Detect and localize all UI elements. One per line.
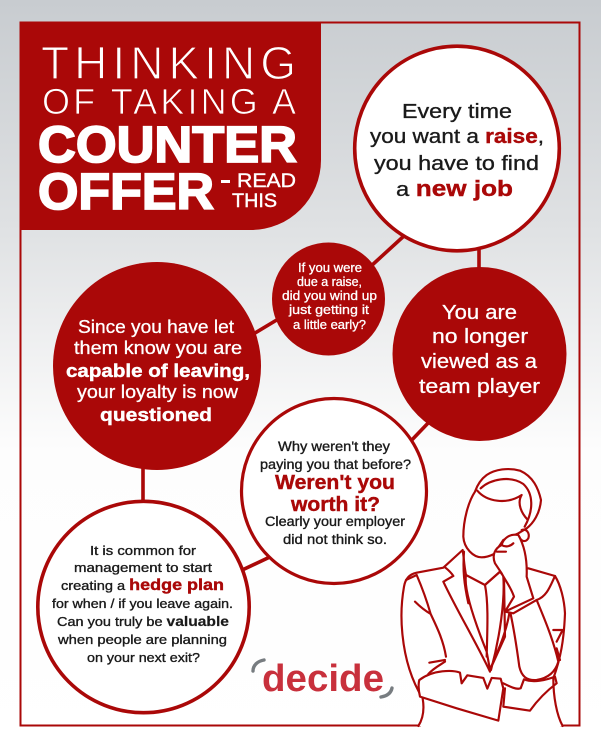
circle: team player: You are: [442, 302, 517, 324]
connector lines between circles: [143, 235, 479, 572]
circle: team player: no longer: [432, 326, 528, 348]
circle: due a raise: a little early?: [293, 318, 366, 332]
folded arm: [419, 671, 503, 721]
circle: hedge plan: when people are planning: [57, 632, 227, 647]
logo brackets: [253, 660, 392, 697]
circle: worth it: paying you that before?: [260, 457, 411, 472]
lapel: [443, 552, 490, 672]
title: this: THIS: [232, 191, 277, 212]
circle: due a raise: did you wind up: [282, 289, 377, 303]
circle: hedge plan: Can you truly be valuable: [57, 613, 229, 629]
title: of taking a: OF TAKING A: [42, 81, 296, 122]
circle: hedge plan: management to start: [74, 560, 212, 575]
circle: new job: Every time: [402, 101, 512, 123]
circle: worth it: [242, 398, 426, 584]
circle: loyalty: them know you are: [74, 338, 242, 358]
circle: new job: [355, 46, 559, 251]
circle: team player: team player: [419, 376, 540, 398]
head and hair: [463, 469, 541, 557]
circle: loyalty: Since you have let: [78, 317, 234, 337]
circle: hedge plan: on your next exit?: [87, 650, 200, 665]
circle: team player: [392, 267, 566, 441]
title: dash: [221, 180, 230, 183]
circle: worth it: Clearly your employer: [265, 514, 406, 529]
title panel: [20, 22, 321, 230]
circle: loyalty: [53, 262, 261, 470]
decide logo: [253, 658, 392, 700]
title: read: READ: [237, 171, 296, 192]
title: thinking: THINKING: [41, 37, 296, 89]
circle: due a raise: just getting it: [288, 303, 370, 317]
circle: hedge plan: [38, 501, 249, 713]
circle: new job: you want a raise ,: [370, 126, 544, 148]
circle: loyalty: questioned: [100, 405, 212, 425]
circle: hedge plan: It is common for: [90, 543, 197, 558]
circle: hedge plan: for when / if you leave again.: [52, 596, 233, 611]
raised hand and forearm: [494, 535, 533, 612]
circle: loyalty: capable of leaving,: [66, 361, 250, 381]
circle: due a raise: If you were: [298, 261, 362, 275]
logo wordmark: decide: [262, 658, 384, 700]
circle: hedge plan: creating a hedge plan: [61, 577, 224, 594]
circle: worth it: Why weren't they: [278, 439, 390, 454]
title: counter: COUNTER: [38, 116, 297, 173]
circle: new job: a new job: [396, 176, 513, 201]
circle: worth it: did not think so.: [283, 532, 387, 547]
circle: due a raise: due a raise,: [297, 275, 362, 289]
illustration: thinking businessman: [401, 469, 565, 730]
circle: loyalty: your loyalty is now: [77, 382, 239, 402]
torso and jacket: [401, 550, 565, 726]
circle: worth it: worth it?: [290, 493, 380, 516]
white gap in frame behind figure: [421, 717, 561, 730]
title: offer: OFFER: [38, 163, 214, 220]
collar and tie: [466, 572, 509, 670]
circle: due a raise: [272, 242, 385, 356]
circle: worth it: Weren't you: [275, 471, 395, 494]
circle: team player: viewed as a: [421, 351, 538, 373]
circle: new job: you have to find: [374, 153, 539, 175]
